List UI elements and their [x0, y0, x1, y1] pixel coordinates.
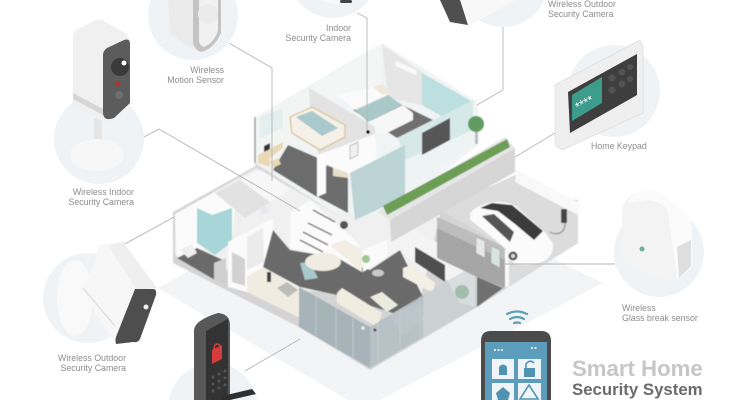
- house illustration: [173, 43, 580, 370]
- glass sensors: [361, 326, 376, 331]
- bunk room window: [260, 108, 283, 138]
- device: wireless motion sensor: [148, 0, 238, 60]
- lower floor: bathroom floor: [177, 248, 223, 280]
- label: wireless motion sensor: Motion Sensor: [167, 75, 224, 85]
- connector lines: [123, 13, 615, 371]
- white wall with picture: [326, 134, 377, 173]
- bunk bed: [290, 107, 345, 150]
- right white wall: [362, 240, 387, 272]
- lower floor: bathroom wall: [175, 192, 235, 258]
- keypad stars: ****: [573, 92, 596, 114]
- upper floor: outer shell: [255, 43, 478, 215]
- upper glass window wall: [422, 73, 473, 127]
- lower floor: back interior: [175, 160, 440, 300]
- upper glass bathroom: [350, 145, 405, 220]
- garage lower wall: [477, 277, 503, 307]
- dining chair: [300, 262, 318, 280]
- desk: [258, 142, 283, 168]
- glass mullions: [316, 297, 420, 363]
- upper lounge terrace: [383, 133, 480, 203]
- sensor dot: [366, 130, 370, 134]
- garage left wall: [437, 228, 505, 288]
- cabinet beside shower: [214, 258, 226, 285]
- device: smartphone app: [481, 331, 551, 400]
- status icons: [494, 348, 538, 350]
- ground plate: [158, 170, 603, 400]
- device: wireless outdoor security camera top: [440, 0, 544, 27]
- toilet: [180, 244, 197, 258]
- label: indoor security camera: Security Camera: [285, 33, 351, 43]
- bed: [337, 84, 413, 135]
- bunk room back wall: [255, 88, 312, 170]
- white narrow wall: [317, 152, 326, 197]
- lower floor: slab: [173, 158, 578, 370]
- lower bath floor patch: [318, 163, 348, 213]
- planter: [377, 137, 515, 242]
- indoor plant: [455, 285, 469, 299]
- bunk room floor: [273, 145, 318, 197]
- title: Smart Home: [572, 356, 703, 381]
- bedroom window wall: [310, 43, 382, 100]
- bedroom right wall: [382, 45, 422, 105]
- bedroom floor: [353, 98, 433, 138]
- device: wireless indoor security camera: [54, 20, 144, 184]
- label: wireless outdoor security camera top: Security Camera: [548, 9, 614, 19]
- garage white post: [505, 245, 509, 288]
- upper slab edge: [255, 163, 336, 214]
- device: wireless outdoor security camera left: [43, 242, 157, 344]
- coffee table: [370, 292, 398, 312]
- lower floor: laundry room: [215, 168, 290, 218]
- alcove: [247, 228, 264, 270]
- device: indoor security camera: [297, 0, 369, 18]
- tv: [415, 247, 445, 282]
- label: home keypad: Home Keypad: [591, 141, 647, 151]
- garage white upper wall: [515, 170, 580, 215]
- sofa: [337, 288, 382, 327]
- cabinet: [333, 155, 348, 178]
- app tile: home: [492, 383, 514, 400]
- label: indoor security camera: Indoor: [326, 23, 351, 33]
- partition wall: [309, 88, 375, 155]
- app tile: unlocked: [518, 359, 541, 379]
- title: [572, 356, 703, 399]
- label: wireless motion sensor: Wireless: [190, 65, 224, 75]
- label: wireless indoor security camera: Wireless Indoor: [73, 187, 134, 197]
- label: wireless glass break sensor: Glass break sensor: [622, 313, 698, 323]
- title: Security System: [572, 380, 703, 399]
- tv console: [403, 265, 435, 293]
- device: home keypad: [555, 40, 660, 150]
- garage left wall top: [437, 217, 505, 260]
- potted plant: [362, 255, 370, 263]
- tree: [468, 116, 484, 144]
- glass front left: [299, 287, 370, 368]
- wall with shelves: [290, 200, 362, 272]
- air conditioner upper: [395, 60, 417, 76]
- armchair seen through glass: [390, 303, 424, 335]
- robot vacuum: [372, 270, 384, 276]
- glass front right: [370, 295, 423, 368]
- app tile: warning: [518, 383, 541, 400]
- wall panels: [476, 237, 500, 268]
- app tile: alarm: [492, 359, 514, 379]
- label: wireless outdoor security camera left: Security Camera: [60, 363, 126, 373]
- upper glass lounge: [398, 100, 473, 160]
- dining table: [305, 253, 341, 271]
- device: smart lock: [169, 313, 257, 400]
- icon: wifi signal: [507, 312, 527, 323]
- air conditioner: [448, 258, 468, 273]
- label: wireless indoor security camera: Security Camera: [68, 197, 134, 207]
- garage floor and wall: [440, 175, 578, 288]
- kitchen counter: [247, 267, 300, 318]
- glass shower: [197, 208, 232, 255]
- device: wireless glass break sensor: [614, 190, 704, 297]
- car: [470, 202, 567, 265]
- left wall edge: [254, 117, 256, 163]
- fridge panel: [232, 252, 245, 286]
- tv wall: [387, 228, 475, 307]
- kitchen white block: [228, 218, 273, 292]
- label: wireless outdoor security camera left: Wireless Outdoor: [58, 353, 126, 363]
- label: wireless glass break sensor: Wireless: [622, 303, 656, 313]
- living floor: [263, 230, 423, 313]
- upper tv: [422, 118, 450, 155]
